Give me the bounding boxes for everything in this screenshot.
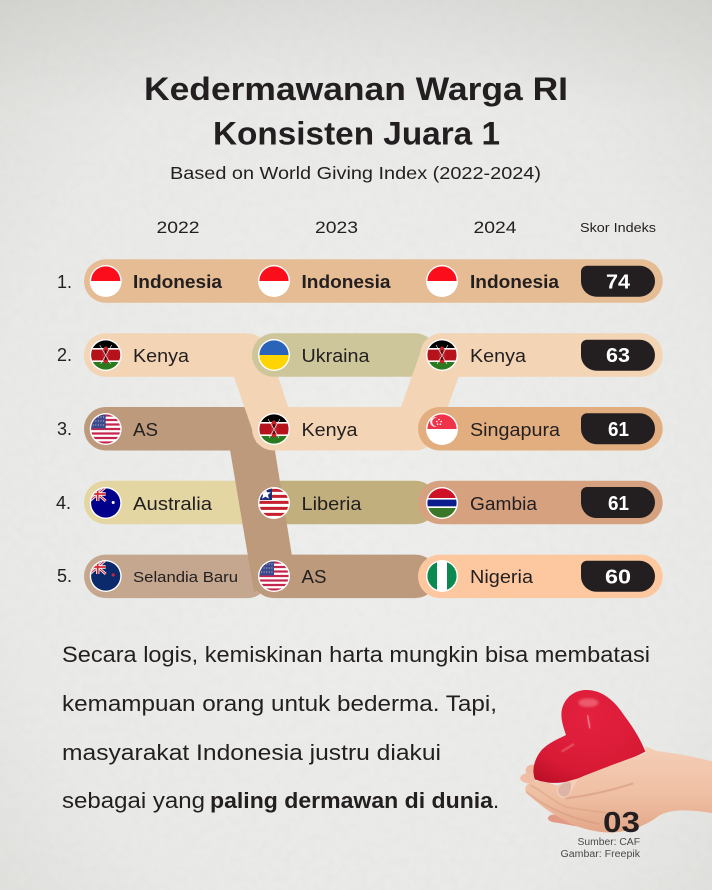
flags and names: rank 5: Nigeria	[470, 566, 534, 587]
subtitle: Based on World Giving Index (2022-2024)	[170, 163, 541, 183]
band: Kenya 2023 rank 3	[252, 407, 437, 450]
flags and names: rank 1: Indonesia	[302, 271, 391, 292]
source credits: Gambar: Freepik	[560, 849, 641, 860]
index scores	[581, 266, 655, 592]
column headers: Skor Indeks	[580, 220, 657, 235]
page number: 03	[603, 807, 640, 839]
band: Kenya 2022 rank 2	[84, 333, 269, 377]
index scores: 61	[608, 492, 629, 515]
image: heart held in hands	[520, 690, 712, 832]
column headers: 2023	[315, 218, 358, 237]
flags and names: rank 2: Kenya	[470, 345, 527, 366]
flags and names: rank 2	[90, 339, 527, 371]
flags and names: rank 1: Indonesia	[470, 271, 560, 292]
flags and names: rank 3: AS	[133, 419, 158, 440]
icon: thumb and finger creases	[526, 778, 633, 824]
body paragraph: .	[493, 788, 499, 813]
icon: back fingers	[520, 765, 578, 827]
connector: AS from rank 3 to rank 5	[225, 420, 292, 592]
rank numbers: 5.	[57, 566, 72, 586]
column headers	[156, 218, 657, 237]
column headers: 2022	[156, 218, 200, 237]
band: Liberia 2023 rank 4	[252, 481, 437, 524]
band: AS 2022 rank 3	[84, 407, 269, 450]
index scores: 63	[606, 344, 630, 367]
band: Kenya 2024 rank 2	[420, 333, 663, 377]
icon: heart	[533, 690, 645, 783]
index scores: 60	[605, 566, 631, 588]
column headers: 2024	[474, 218, 516, 237]
band: Ukraina 2023 rank 2	[252, 333, 437, 377]
flags and names: rank 3: Singapura	[470, 419, 561, 440]
rank numbers: 4.	[56, 493, 71, 513]
rank numbers: 1.	[57, 272, 72, 292]
source credits: Sumber: CAF	[578, 837, 640, 848]
body paragraph: sebagai yang	[62, 788, 205, 813]
band: Gambia 2024 rank 4	[418, 481, 663, 524]
band: Selandia Baru 2022 rank 5	[84, 555, 269, 598]
flags and names: rank 1: Indonesia	[133, 271, 223, 292]
flags and names: rank 4: Gambia	[470, 493, 538, 514]
flags and names: rank 2: Kenya	[133, 345, 190, 366]
index scores: 74	[606, 270, 631, 294]
rank numbers: 2.	[57, 345, 72, 365]
band: Nigeria 2024 rank 5	[418, 555, 663, 598]
flags and names: rank 3	[90, 413, 561, 445]
body paragraph: paling dermawan di dunia	[210, 788, 494, 813]
title	[144, 71, 568, 152]
flags and names: rank 4: Liberia	[302, 493, 362, 514]
title: Konsisten Juara 1	[213, 116, 500, 152]
rank numbers: 3.	[57, 419, 72, 439]
source credits	[560, 837, 641, 860]
body paragraph: masyarakat Indonesia justru diakui	[62, 740, 441, 765]
flags and names: rank 1	[90, 265, 560, 297]
flags and names: rank 2: Ukraina	[302, 345, 370, 366]
ranking chart	[84, 259, 663, 598]
band: AS 2023 rank 5	[252, 555, 437, 598]
title: Kedermawanan Warga RI	[144, 71, 568, 107]
body paragraph: kemampuan orang untuk bederma. Tapi,	[62, 691, 497, 716]
band: Singapura 2024 rank 3	[418, 407, 663, 450]
connector: Kenya from 2023 rank 3 to 2024 rank 2	[400, 345, 470, 412]
flags and names: rank 5: AS	[302, 566, 326, 587]
flags and names: rank 4: Australia	[133, 493, 213, 514]
band: Australia 2022 rank 4	[84, 481, 269, 524]
body paragraph	[62, 642, 650, 813]
body paragraph: Secara logis, kemiskinan harta mungkin bisa membatasi	[62, 642, 650, 667]
row 1 band: Indonesia	[84, 259, 663, 303]
flags and names: rank 3: Kenya	[302, 419, 358, 440]
connector: Kenya from 2022 rank 2 to 2023 rank 3	[232, 370, 290, 443]
flags and names: rank 5: Selandia Baru	[133, 569, 238, 586]
rank numbers	[56, 272, 72, 586]
icon: heart highlights	[562, 698, 598, 752]
icon: hand and arm	[525, 746, 712, 832]
flags and names: rank 4	[90, 487, 538, 519]
index scores: 61	[608, 418, 629, 441]
flags and names: rank 5	[90, 560, 534, 592]
